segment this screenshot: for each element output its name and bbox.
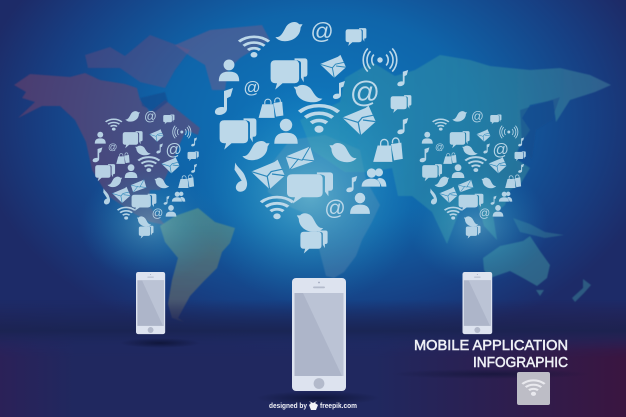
map: Arctic islands — [85, 35, 190, 88]
icon: bird — [329, 143, 357, 162]
light glow: center — [195, 85, 425, 305]
icon: mail — [286, 146, 314, 170]
phone: right — [462, 272, 492, 334]
phone: left — [136, 272, 165, 334]
icon: wifi — [239, 37, 269, 58]
map: South America — [160, 208, 235, 322]
icon: wifi — [522, 380, 545, 396]
icon: chat — [346, 28, 366, 46]
icon: signal — [363, 48, 397, 72]
icon: person — [350, 193, 370, 214]
icon: chat — [220, 118, 256, 150]
credit line: designed by — [269, 401, 308, 410]
icon: bird — [242, 141, 270, 160]
credit line — [269, 401, 357, 410]
icon: wifi — [299, 106, 339, 133]
phone shadow: center — [256, 391, 380, 405]
icon: bird — [294, 85, 322, 102]
icon: chat — [287, 172, 333, 204]
icon: chat — [391, 95, 411, 113]
icon: person — [274, 119, 298, 144]
icon: at sign: @ — [243, 78, 261, 97]
icon: freepik logo — [309, 401, 318, 410]
title: INFOGRAPHIC — [473, 354, 568, 371]
credit line: freepik.com — [320, 401, 357, 410]
map: North America — [14, 73, 200, 225]
icon: bags — [373, 138, 403, 162]
phone shadow: right — [390, 369, 590, 379]
icon: at sign: @ — [310, 18, 334, 44]
world map — [14, 25, 611, 322]
icon: torn mail — [320, 55, 346, 78]
icon: big note — [235, 163, 247, 192]
phone: center — [292, 278, 346, 391]
icon: note — [333, 81, 345, 99]
map: Australia — [483, 236, 550, 286]
map: Japan and islands — [520, 97, 560, 160]
floor — [0, 300, 626, 417]
icon: torn mail — [251, 160, 285, 189]
icon: chat — [271, 58, 307, 90]
map: New Zealand — [572, 279, 591, 302]
map: Eurasia — [300, 55, 611, 244]
icon: note — [397, 70, 408, 86]
icon: person — [219, 59, 239, 81]
map: Africa — [268, 135, 380, 278]
icon: wifi — [261, 197, 293, 219]
icon: chat — [300, 230, 328, 254]
icon: bags — [259, 98, 283, 118]
icon: at sign: @ — [350, 76, 380, 109]
map: Indonesia — [513, 218, 564, 238]
icon cluster: center — [215, 18, 411, 254]
light glow: left — [80, 167, 220, 283]
icon: bird — [297, 213, 323, 232]
icon: bird — [275, 22, 303, 41]
title — [414, 337, 568, 371]
icon: note — [397, 118, 408, 134]
title: MOBILE APPLICATION — [414, 337, 568, 354]
icon cluster: right — [420, 109, 526, 238]
icon cluster: left — [93, 109, 199, 238]
icon: torn mail — [342, 106, 376, 135]
icon: people — [362, 168, 386, 187]
map: Tasmania — [536, 290, 544, 296]
light glow: right — [408, 167, 548, 283]
icon: at sign: @ — [324, 197, 346, 220]
wifi tile — [517, 372, 550, 405]
icon: note — [346, 176, 357, 192]
map: Greenland — [175, 25, 270, 90]
phone shadow: left — [120, 338, 200, 348]
icon: big note — [215, 88, 233, 115]
map: Hudson Bay — [140, 92, 168, 112]
